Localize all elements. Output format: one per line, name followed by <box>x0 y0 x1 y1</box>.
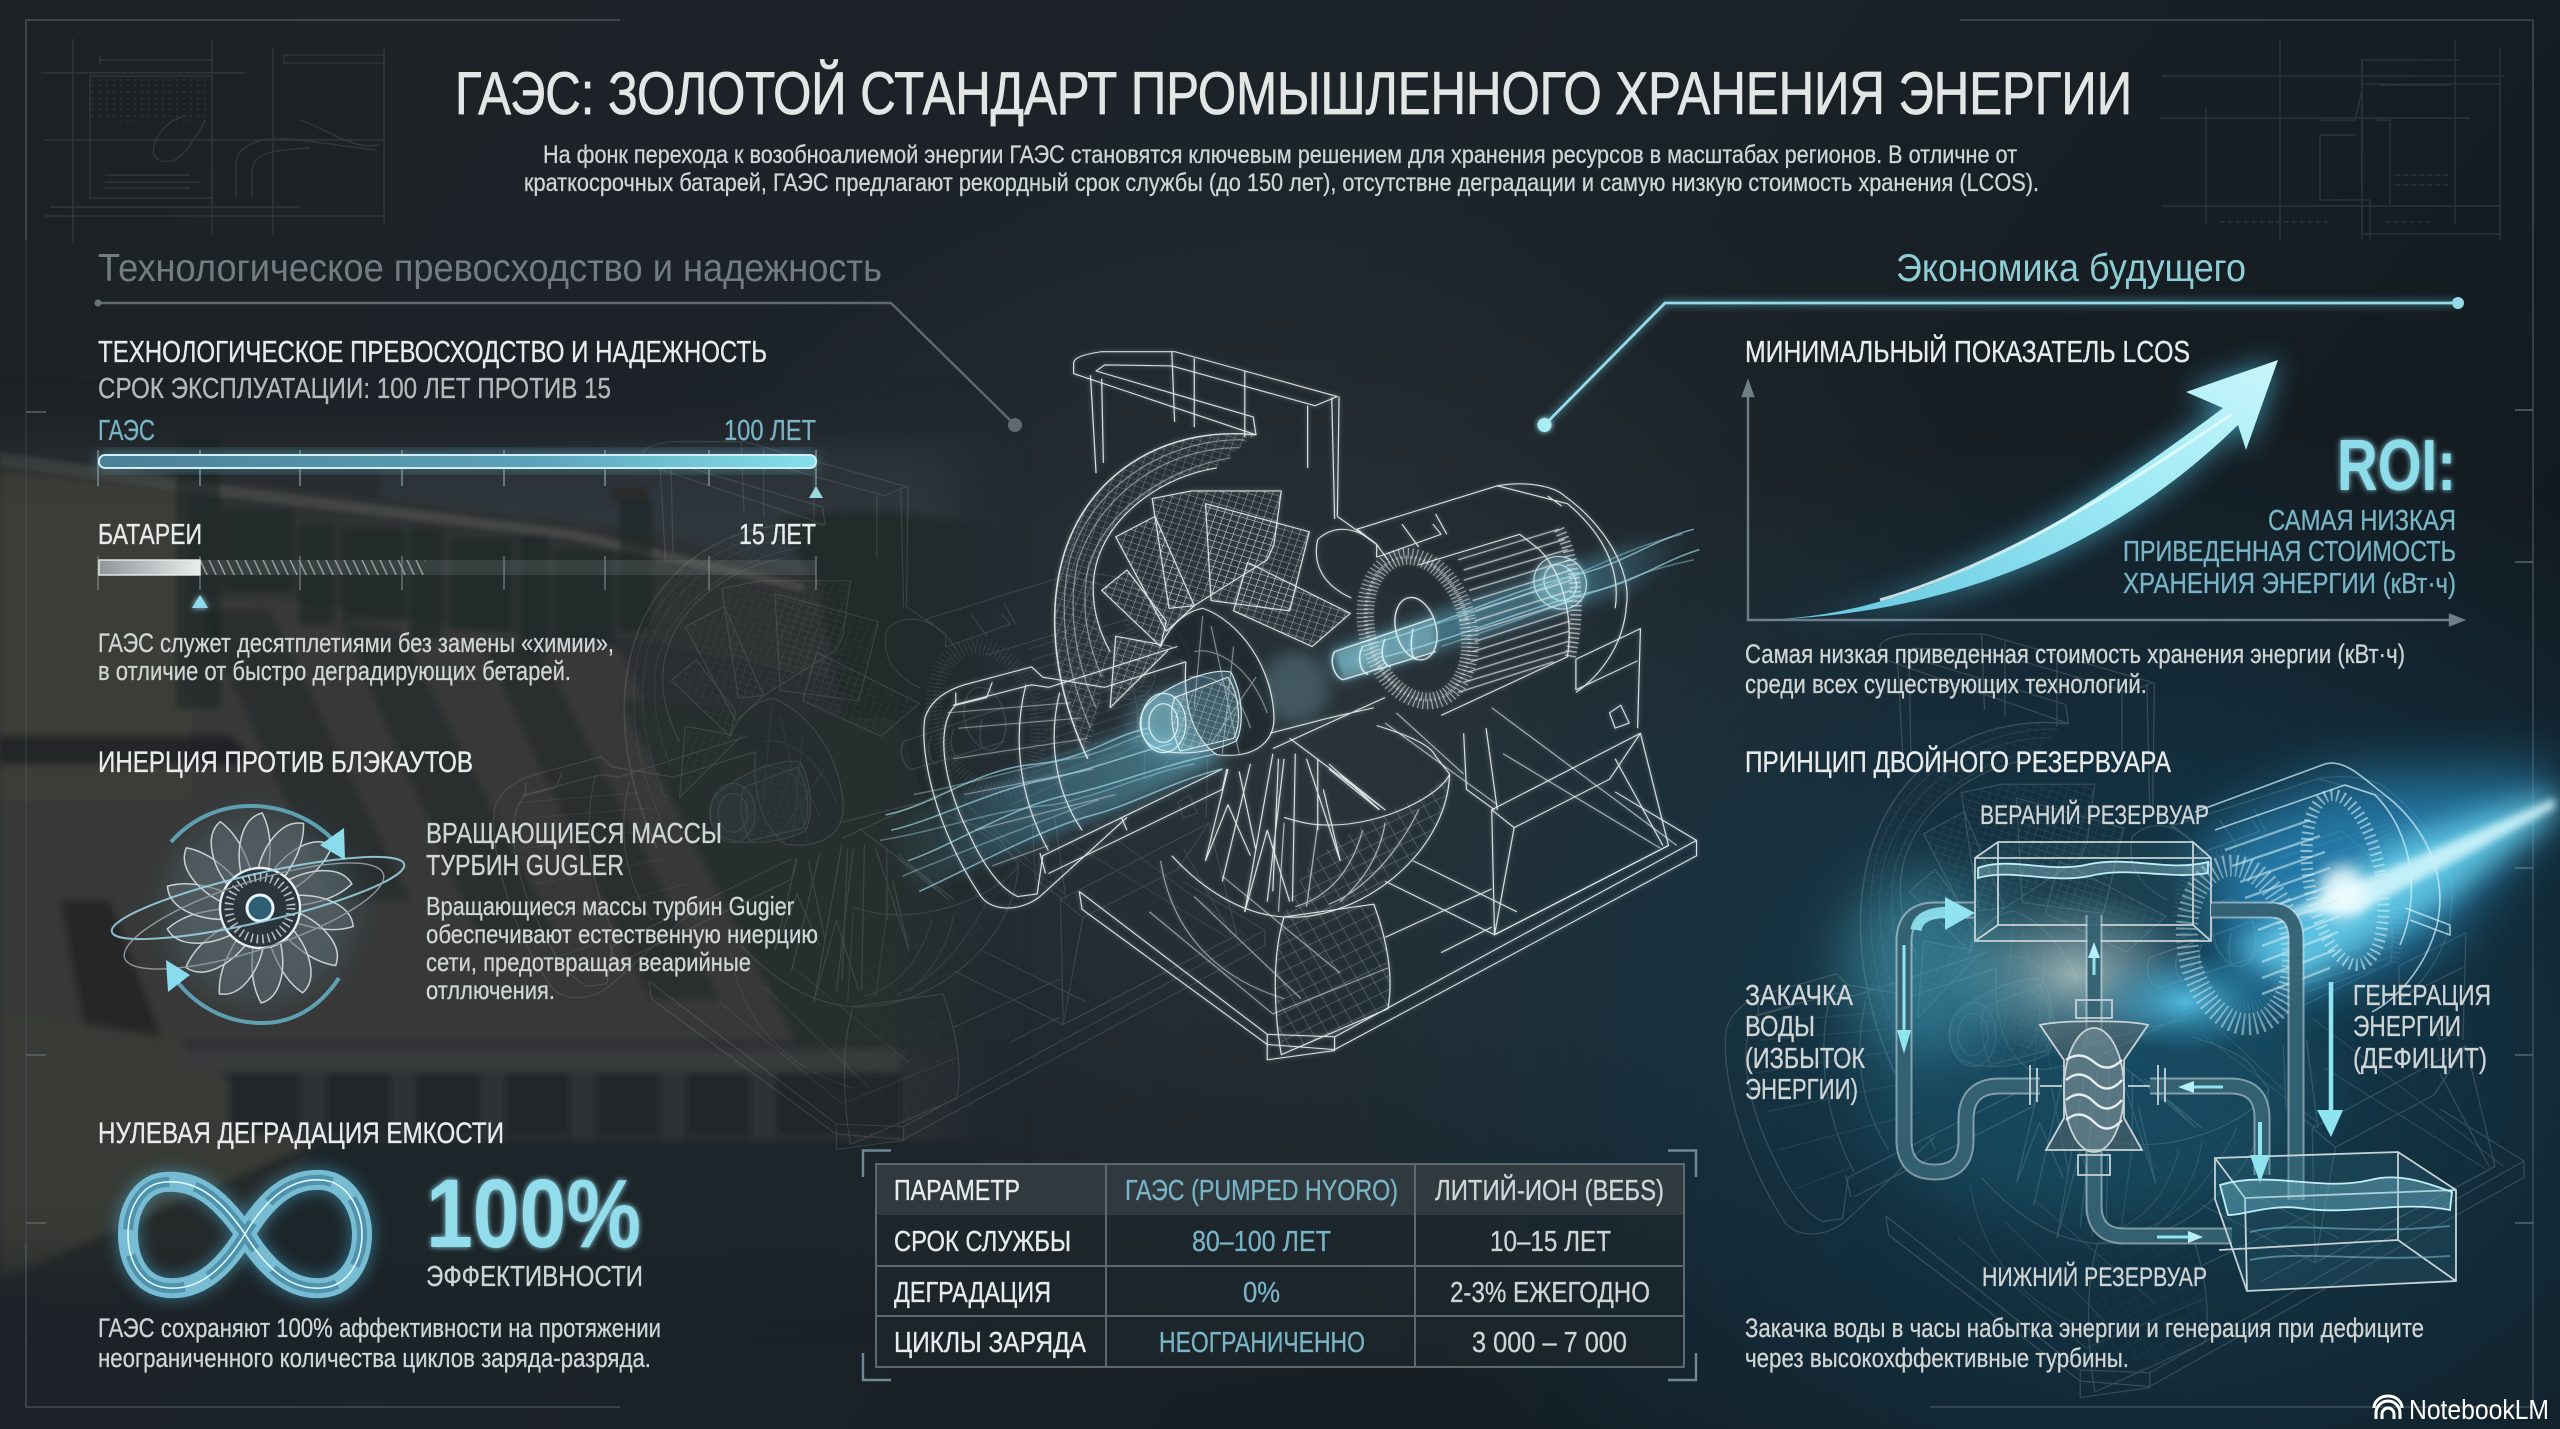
reservoir note <box>1745 1313 2424 1373</box>
table header row: ПАРАМЕТР <box>894 1175 1020 1207</box>
batteries bar: БАТАРЕИ <box>98 519 202 551</box>
inertia subheading <box>426 818 722 882</box>
pump turbine <box>2030 1000 2165 1175</box>
ghost turbine left <box>494 442 1265 1150</box>
diagram labels: ВЕРАНИЙ РЕЗЕРВУАР <box>1980 799 2209 830</box>
table row: degradation: ДЕГРАДАЦИЯ <box>894 1277 1051 1309</box>
section heading: technology: Технологическое превосходство и надежность <box>98 247 882 290</box>
reservoir heading: ПРИНЦИП ДВОЙНОГО РЕЗЕРВУАРА <box>1745 745 2171 779</box>
blueprint sketch: top right <box>2160 39 2504 241</box>
LCOS note: Самая низкая приведенная стоимость хранения энергии (кВт·ч) <box>1745 639 2405 669</box>
lifetime note <box>98 628 614 686</box>
ghost turbine behind reservoir <box>1725 634 2524 1398</box>
inertia subheading: ВРАЩАЮЩИЕСЯ МАССЫ <box>426 818 722 850</box>
degradation note: неограниченного количества циклов заряда-разряда. <box>98 1343 651 1373</box>
background generator wireframe <box>2175 763 2450 1033</box>
panel: zero degradation <box>98 1117 661 1373</box>
blueprint sketch: top left <box>41 39 385 243</box>
intro text: краткосрочных батарей, ГАЭС предлагают рекордный срок службы (до 150 лет), отсутствне деградации и самую низкую стоимость хранения (LCOS). <box>524 169 2039 197</box>
flow arrows <box>1897 897 2343 1243</box>
diagram labels <box>1745 799 2491 1292</box>
batteries bar <box>98 519 816 608</box>
icon: spinning turbine <box>106 806 410 1023</box>
reservoir note: Закачка воды в часы набытка энергии и генерация при дефиците <box>1745 1313 2424 1343</box>
comparison table <box>863 1150 1696 1380</box>
panel: inertia <box>98 746 818 1023</box>
table row: lifetime <box>894 1226 1611 1258</box>
LCOS note <box>1745 639 2405 699</box>
table row: lifetime: 10–15 ЛЕТ <box>1490 1226 1611 1258</box>
ROI description: ХРАНЕНИЯ ЭНЕРГИИ (кВт·ч) <box>2123 568 2456 600</box>
rising arrow <box>1760 360 2278 620</box>
vertical axis line <box>1279 318 1281 1130</box>
diagram labels: ЭНЕРГИИ) <box>1745 1074 1858 1106</box>
table header row: ГАЭС (PUMPED HYORO) <box>1125 1175 1398 1207</box>
inertia description <box>426 891 818 1005</box>
LCOS heading: МИНИМАЛЬНЫЙ ПОКАЗАТЕЛЬ LCOS <box>1745 333 2190 369</box>
degradation note <box>98 1313 661 1373</box>
degradation heading: НУЛЕВАЯ ДЕГРАДАЦИЯ ЕМКОСТИ <box>98 1117 504 1150</box>
icon: infinity <box>128 1180 362 1288</box>
inertia subheading: ТУРБИН GUGLER <box>426 850 624 882</box>
diagram labels: ЭНЕРГИИ <box>2353 1011 2461 1043</box>
stat: 100%: 100% <box>426 1159 641 1268</box>
lifetime subheading: СРОК ЭКСПЛУАТАЦИИ: 100 ЛЕТ ПРОТИВ 15 <box>98 373 611 405</box>
lifetime note: в отличие от быстро деградирующих бетарей. <box>98 656 571 686</box>
title: ГАЭС: ЗОЛОТОЙ СТАНДАРТ ПРОМЫШЛЕННОГО ХРАНЕНИЯ ЭНЕРГИИ <box>455 60 2132 127</box>
intro text <box>524 141 2039 197</box>
pumped storage bar: 100 ЛЕТ <box>724 415 816 447</box>
upper reservoir <box>1975 842 2211 941</box>
table row: lifetime: СРОК СЛУЖБЫ <box>894 1226 1071 1258</box>
diagram labels: НИЖНИЙ РЕЗЕРВУАР <box>1982 1261 2207 1292</box>
diagram labels: ГЕНЕРАЦИЯ <box>2353 980 2491 1012</box>
degradation note: ГАЭС сохраняют 100% аффективности на протяжении <box>98 1313 661 1343</box>
table row: cycles: НЕОГРАНИЧЕННО <box>1159 1327 1365 1359</box>
ROI description: САМАЯ НИЗКАЯ <box>2268 505 2456 537</box>
panel: lifetime comparison <box>98 334 823 686</box>
section heading: economics: Экономика будущего <box>1896 247 2246 290</box>
table header row: ЛИТИЙ-ИОН (ВЕБS) <box>1435 1173 1664 1207</box>
inertia description: обеспечивают естественную ниерцию <box>426 919 818 949</box>
stat label: ЭФФЕКТИВНОСТИ <box>426 1261 643 1293</box>
pumped storage bar: ГАЭС <box>98 415 155 447</box>
lifetime heading: ТЕХНОЛОГИЧЕСКОЕ ПРЕВОСХОДСТВО И НАДЕЖНОСТЬ <box>98 334 767 369</box>
diagram labels: ВОДЫ <box>1745 1011 1815 1043</box>
ROI heading: ROI: <box>2337 426 2456 506</box>
central turbine cutaway <box>880 318 1699 1130</box>
water flow glow <box>880 534 1699 891</box>
section heading: technology <box>94 247 1022 432</box>
lower reservoir <box>2215 1152 2456 1291</box>
ROI description: ПРИВЕДЕННАЯ СТОИМОСТЬ <box>2123 536 2456 568</box>
lifetime note: ГАЭС служет десятплетиями без замены «химии», <box>98 628 614 658</box>
turbine wireframe <box>924 352 1697 1060</box>
inertia description: отллючения. <box>426 975 555 1005</box>
pipes <box>1904 910 2296 1236</box>
reservoir note: через высокохффективные турбины. <box>1745 1343 2129 1373</box>
diagram labels: ЗАКАЧКА <box>1745 980 1854 1012</box>
table row: cycles: ЦИКЛЫ ЗАРЯДА <box>894 1327 1087 1359</box>
inertia description: сети, предотвращая веарийные <box>426 947 751 977</box>
panel: dual reservoir <box>1745 745 2555 1373</box>
diagram labels: (ИЗБЫТОК <box>1745 1043 1865 1075</box>
diagram glows <box>1845 770 2555 1220</box>
table row: degradation <box>894 1277 1650 1309</box>
batteries bar: 15 ЛЕТ <box>739 519 816 551</box>
table row: degradation: 2-3% ЕЖЕГОДНО <box>1450 1277 1650 1309</box>
table row: cycles: 3 000 – 7 000 <box>1472 1327 1627 1359</box>
inertia heading: ИНЕРЦИЯ ПРОТИВ БЛЭКАУТОВ <box>98 746 473 779</box>
chart axes <box>1743 382 2463 625</box>
section heading: economics <box>1538 247 2464 432</box>
table row: degradation: 0% <box>1243 1277 1280 1309</box>
turbine wireframe glow <box>924 352 1697 1060</box>
table body <box>876 1164 1684 1367</box>
background photo: dam <box>0 444 948 1278</box>
diagram labels: (ДЕФИЦИТ) <box>2353 1043 2487 1075</box>
ROI description <box>2123 505 2456 600</box>
water flow lines <box>880 529 1699 891</box>
table header row <box>894 1173 1664 1207</box>
table corner brackets <box>863 1150 1696 1380</box>
inertia description: Вращающиеся массы турбин Gugier <box>426 891 794 921</box>
table row: cycles <box>894 1327 1627 1359</box>
LCOS note: среди всех существующих технологий. <box>1745 669 2147 699</box>
intro text: На фонк перехода к возобноалиемой энергии ГАЭС становятся ключевым решением для хранения ресурсов в масштабах регионов. В отличне от <box>543 141 2017 169</box>
pumped storage bar <box>98 415 823 498</box>
table row: lifetime: 80–100 ЛЕТ <box>1192 1226 1331 1258</box>
panel: LCOS chart <box>1743 333 2463 699</box>
